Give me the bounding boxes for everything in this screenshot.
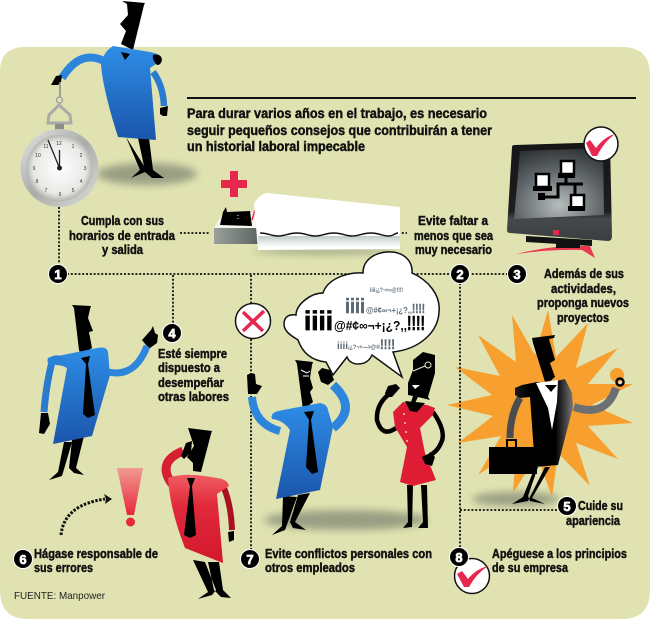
briefcase — [489, 447, 537, 474]
symbol line 3 — [304, 306, 425, 336]
icon: pocket watch — [20, 82, 98, 207]
screen — [514, 148, 604, 219]
icon: exclamation mark — [117, 468, 143, 526]
text: Evite conflictos — [265, 546, 432, 575]
number badges: 4 — [168, 326, 176, 341]
icon: red X badge — [236, 304, 270, 338]
tie — [81, 356, 95, 418]
stand — [516, 246, 595, 258]
text: Cuide: apariencia — [566, 513, 621, 528]
text: Hágase: Hágase responsable de — [34, 546, 158, 561]
illustration: computer monitor — [507, 127, 618, 258]
raised hand — [385, 384, 400, 397]
torso — [272, 403, 333, 499]
symbol line 3: !!!! — [407, 313, 425, 335]
text: Además — [537, 266, 629, 325]
head — [187, 428, 212, 472]
figure: woman in red dress — [377, 352, 443, 528]
orange starburst — [447, 310, 633, 497]
numerals: 1 — [72, 144, 75, 150]
hand on head — [181, 441, 192, 459]
hand on side — [160, 106, 168, 116]
collar — [121, 52, 130, 60]
legs — [49, 436, 84, 480]
figure: blue man pointing up — [39, 305, 158, 480]
text: Cumpla: horarios de entrada — [69, 228, 176, 243]
number badges: 2 — [456, 267, 464, 282]
heading text: Para durar varios años en el trabajo, es necesario — [187, 106, 487, 121]
numerals: 9 — [33, 166, 36, 172]
collar — [405, 401, 425, 412]
number badges: 3 — [513, 267, 521, 282]
connector dotted lines — [59, 207, 560, 550]
text: Cuide: Cuide su — [578, 498, 623, 513]
text: Esté siempre: otras labores — [158, 389, 229, 404]
head — [295, 360, 313, 410]
glasses — [413, 362, 431, 371]
bow — [48, 105, 71, 123]
angry eyes — [301, 370, 310, 376]
hand — [228, 531, 234, 542]
symbol line 2 — [345, 296, 425, 318]
text: Además: actividades, — [551, 281, 616, 296]
raised hand — [142, 326, 158, 348]
numerals — [33, 141, 87, 198]
text: Hágase — [34, 546, 158, 575]
number badges: 1 — [54, 267, 62, 282]
arm holding watch — [62, 57, 104, 78]
text: Evite faltar: menos que sea — [414, 228, 494, 243]
number badges: 6 — [19, 552, 27, 567]
text: Cumpla — [69, 213, 176, 257]
text: Apéguese — [492, 546, 627, 575]
text: Además: proponga nuevos — [537, 295, 629, 310]
raised arm left — [252, 397, 280, 431]
cloud — [284, 252, 439, 377]
heading text: un historial laboral impecable — [187, 139, 365, 154]
red accent — [252, 210, 255, 220]
bed box front — [214, 228, 259, 244]
torso — [101, 46, 162, 140]
far arm — [44, 362, 52, 412]
heading rule — [187, 97, 636, 99]
illustration: man in bed — [214, 193, 400, 250]
text: Evite faltar: Evite faltar a — [418, 213, 489, 228]
head — [532, 335, 555, 383]
text: Hágase: sus errores — [34, 560, 93, 575]
figure: angry blue man — [247, 360, 346, 535]
numerals: 6 — [59, 192, 62, 198]
symbol line 4: !!!! — [380, 336, 395, 352]
dial — [26, 135, 92, 201]
number badges — [14, 264, 576, 568]
right arm — [430, 412, 443, 455]
text: Cuide — [566, 498, 623, 528]
head — [72, 305, 93, 355]
numerals: 5 — [72, 188, 75, 194]
numerals: 3 — [84, 166, 87, 172]
collar roll — [153, 55, 162, 65]
symbol line 3: @#¢∞¬+¡¿?,, — [334, 318, 407, 333]
legs — [272, 493, 310, 535]
symbol line 2: !!!! — [412, 301, 425, 316]
speech bubble — [284, 252, 439, 377]
number badges: 5 — [563, 499, 571, 514]
numerals: 10 — [35, 153, 41, 159]
symbol line 3: iiii — [304, 306, 333, 336]
white shirt — [536, 380, 558, 430]
arm — [108, 346, 147, 373]
hand holding chain — [51, 75, 62, 85]
torso — [53, 348, 110, 444]
text: Apéguese: de su empresa — [492, 560, 569, 575]
symbol line 1: iiii¡¿?¬+∞@!!!! — [370, 288, 403, 294]
smile — [412, 385, 420, 389]
right hand — [318, 368, 334, 385]
shadows under figures — [97, 163, 560, 530]
left arm — [377, 395, 396, 432]
collar roll — [48, 355, 67, 368]
text: Evite conflictos: otros empleados — [265, 560, 355, 575]
legs — [512, 467, 550, 504]
text: Además: proyectos — [557, 310, 609, 325]
numerals: 8 — [36, 179, 39, 185]
lower hand — [39, 413, 50, 434]
arm holding case — [510, 398, 520, 438]
text: Apéguese: Apéguese a los principios — [492, 546, 627, 561]
hands — [48, 140, 60, 168]
legs — [193, 560, 231, 599]
legs — [403, 485, 428, 528]
case — [20, 129, 98, 207]
dress buttons — [403, 413, 408, 442]
numerals: 7 — [45, 188, 48, 194]
text: Cumpla: y salida — [102, 242, 144, 257]
hip hand — [422, 453, 435, 466]
text: Esté siempre: Esté siempre — [158, 346, 227, 361]
left hand — [247, 373, 262, 394]
symbol line 4: ¡¿?¬+—>@® — [348, 344, 381, 351]
hair and head — [408, 352, 435, 403]
raised arm — [574, 388, 616, 410]
figure: blue man with pocket watch — [51, 1, 168, 178]
network icon — [533, 161, 585, 211]
dress — [393, 402, 436, 486]
wave line — [260, 233, 398, 236]
box top — [214, 212, 258, 228]
head dots — [237, 215, 239, 219]
heading text: seguir pequeños consejos que contribuirán a tener — [187, 123, 493, 138]
dotted arrow — [61, 494, 112, 535]
tie — [184, 478, 196, 538]
symbol line 4: iiii — [337, 341, 348, 352]
text: Evite conflictos: Evite conflictos personales con — [265, 546, 432, 561]
icon: red cross — [221, 171, 247, 197]
far arm — [224, 488, 232, 530]
text: Cumpla: Cumpla con sus — [81, 213, 164, 228]
chain — [59, 82, 61, 98]
power light — [553, 230, 559, 235]
text: Esté siempre: desempeñar — [158, 375, 224, 390]
number badges: 7 — [246, 552, 254, 567]
legs — [126, 137, 164, 178]
tie knot — [545, 385, 557, 392]
symbol line 2: @#¢∞¬+¡¿?,, — [366, 306, 412, 315]
numerals: 11 — [43, 144, 49, 150]
icon: check badge — [454, 558, 490, 594]
symbol line 4 — [337, 336, 395, 352]
heading text — [187, 106, 493, 154]
sheet — [254, 193, 400, 250]
torso — [515, 379, 573, 467]
figure: red man hand to head — [166, 428, 234, 599]
symbol line 2: iiii — [345, 296, 365, 318]
torso — [168, 475, 229, 563]
briefcase handle — [507, 440, 516, 447]
text: Además: Además de sus — [544, 266, 624, 281]
figure: man in black suit — [489, 335, 624, 504]
sheet shading — [258, 236, 400, 247]
tie — [304, 411, 318, 474]
number badges: 8 — [455, 550, 463, 565]
numerals: 12 — [56, 141, 62, 147]
numerals: 2 — [80, 153, 83, 159]
raised arm right — [333, 385, 346, 428]
text: Esté siempre: dispuesto a — [158, 360, 221, 375]
far arm — [153, 72, 164, 106]
source note: FUENTE: Manpower — [14, 590, 105, 602]
body — [507, 142, 612, 241]
check badge — [584, 127, 618, 161]
sleeper head — [220, 207, 252, 226]
glint — [610, 368, 624, 382]
numerals: 4 — [80, 179, 83, 185]
hand — [616, 378, 624, 386]
raised arm — [166, 451, 183, 484]
text: Esté siempre — [158, 346, 229, 404]
text: Evite faltar — [414, 213, 494, 257]
text: Evite faltar: muy necesario — [415, 242, 492, 257]
head — [120, 1, 145, 50]
